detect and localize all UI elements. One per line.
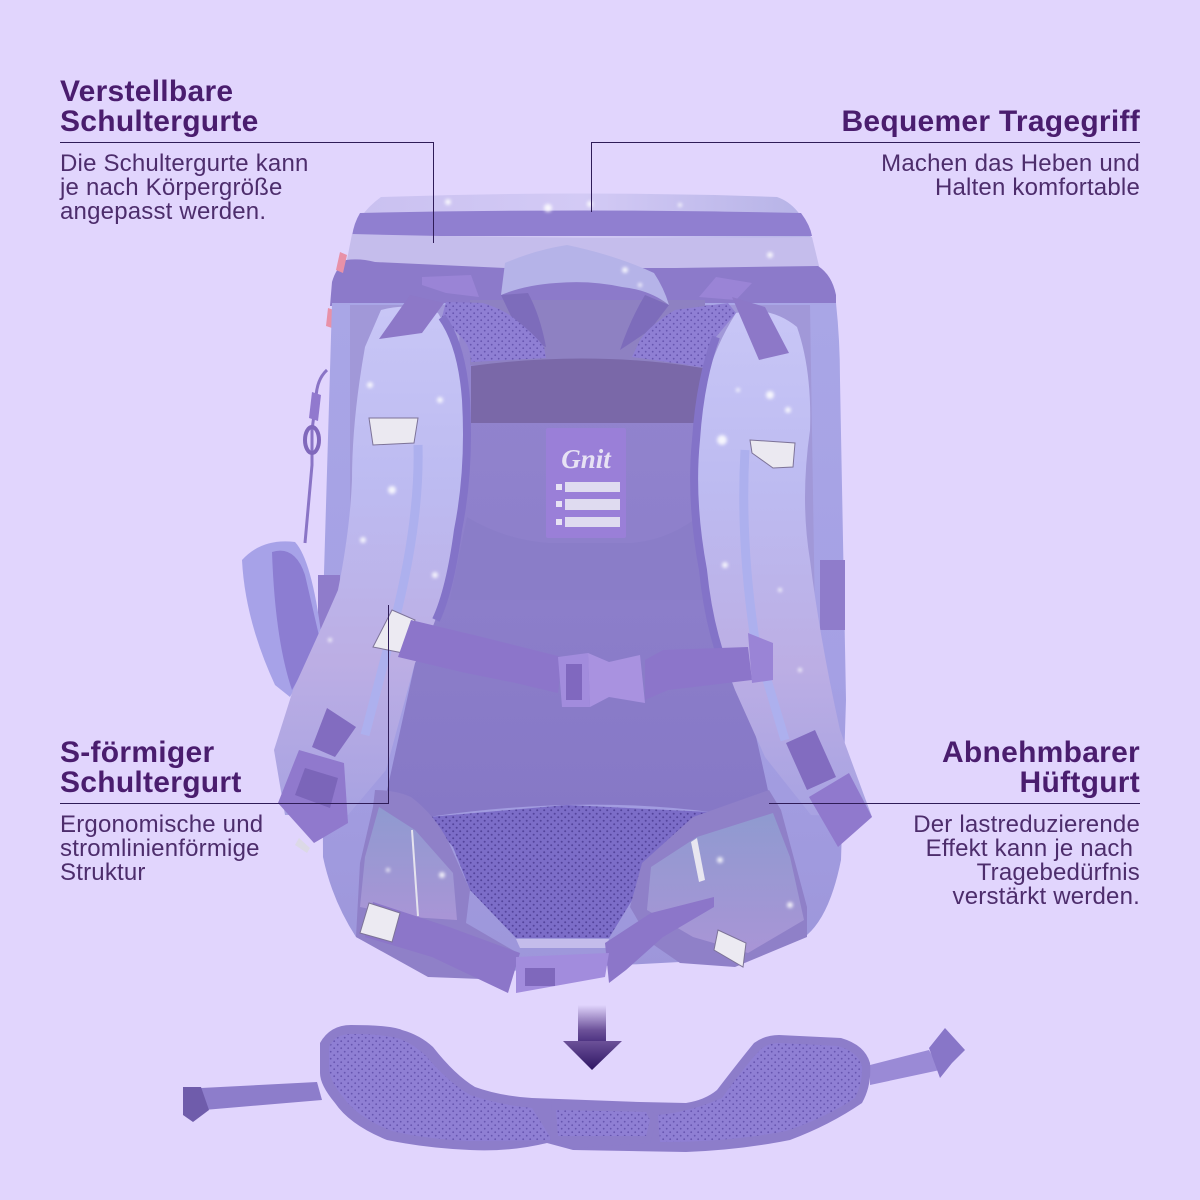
- text: Verstellbare Schultergurte: je nach Körpergröße: [60, 174, 283, 201]
- right hip wing: [605, 790, 807, 983]
- text: Bequemer Tragegriff: [881, 150, 1140, 201]
- center hip mesh: [428, 805, 710, 948]
- backpack top lid: [326, 194, 836, 328]
- heading: Bequemer Tragegriff: Bequemer Tragegriff: [841, 105, 1140, 138]
- text: Abnehmbarer Hüftgurt: verstärkt werden.: [953, 883, 1140, 910]
- galaxy stars: [328, 199, 802, 908]
- right shoulder strap: [694, 277, 872, 847]
- text: S-förmiger Schultergurt: Struktur: [60, 859, 146, 886]
- text: S-förmiger Schultergurt: Ergonomische und: [60, 811, 263, 838]
- keychain and pouch: [242, 370, 327, 697]
- text: Bequemer Tragegriff: Machen das Heben und: [881, 150, 1140, 177]
- carry handle: [501, 245, 669, 350]
- heading: Abnehmbarer Hüftgurt: Hüftgurt: [1020, 766, 1140, 799]
- callout lines: [60, 142, 1140, 804]
- detached hip belt: [183, 1025, 965, 1152]
- text: S-förmiger Schultergurt: stromlinienförmige: [60, 835, 260, 862]
- text: Abnehmbarer Hüftgurt: Der lastreduzierende: [913, 811, 1140, 838]
- logo label: [546, 428, 626, 538]
- text: S-förmiger Schultergurt: [60, 811, 263, 886]
- chest strap and buckle: [398, 620, 773, 707]
- back panel: [386, 300, 769, 817]
- text: Verstellbare Schultergurte: [59, 150, 309, 225]
- heading: Verstellbare Schultergurte: Schultergurte: [60, 105, 259, 138]
- left shoulder strap: [274, 275, 479, 853]
- arrow: [563, 1005, 622, 1070]
- text: Verstellbare Schultergurte: Die Schultergurte kann: [60, 150, 309, 177]
- top mesh pads: [442, 302, 736, 367]
- text: Verstellbare Schultergurte: angepasst werden.: [60, 198, 266, 225]
- left hip wing: [356, 790, 520, 993]
- heading: Abnehmbarer Hüftgurt: [942, 736, 1140, 799]
- backpack main body: [318, 303, 846, 975]
- text: Abnehmbarer Hüftgurt: Effekt kann je nach: [926, 835, 1133, 862]
- heading: S-förmiger Schultergurt: [60, 736, 242, 799]
- heading: Verstellbare Schultergurte: Verstellbare: [60, 75, 233, 108]
- hip belt buckle: [516, 953, 609, 993]
- heading: S-förmiger Schultergurt: S-förmiger: [60, 736, 214, 769]
- logo label: Gnit: [561, 444, 612, 474]
- text: Abnehmbarer Hüftgurt: [913, 811, 1140, 910]
- heading: S-förmiger Schultergurt: Schultergurt: [60, 766, 242, 799]
- text: Abnehmbarer Hüftgurt: Tragebedürfnis: [977, 859, 1140, 886]
- heading: Abnehmbarer Hüftgurt: Abnehmbarer: [942, 736, 1140, 769]
- text: Bequemer Tragegriff: Halten komfortable: [935, 174, 1140, 201]
- heading: Verstellbare Schultergurte: [60, 75, 259, 138]
